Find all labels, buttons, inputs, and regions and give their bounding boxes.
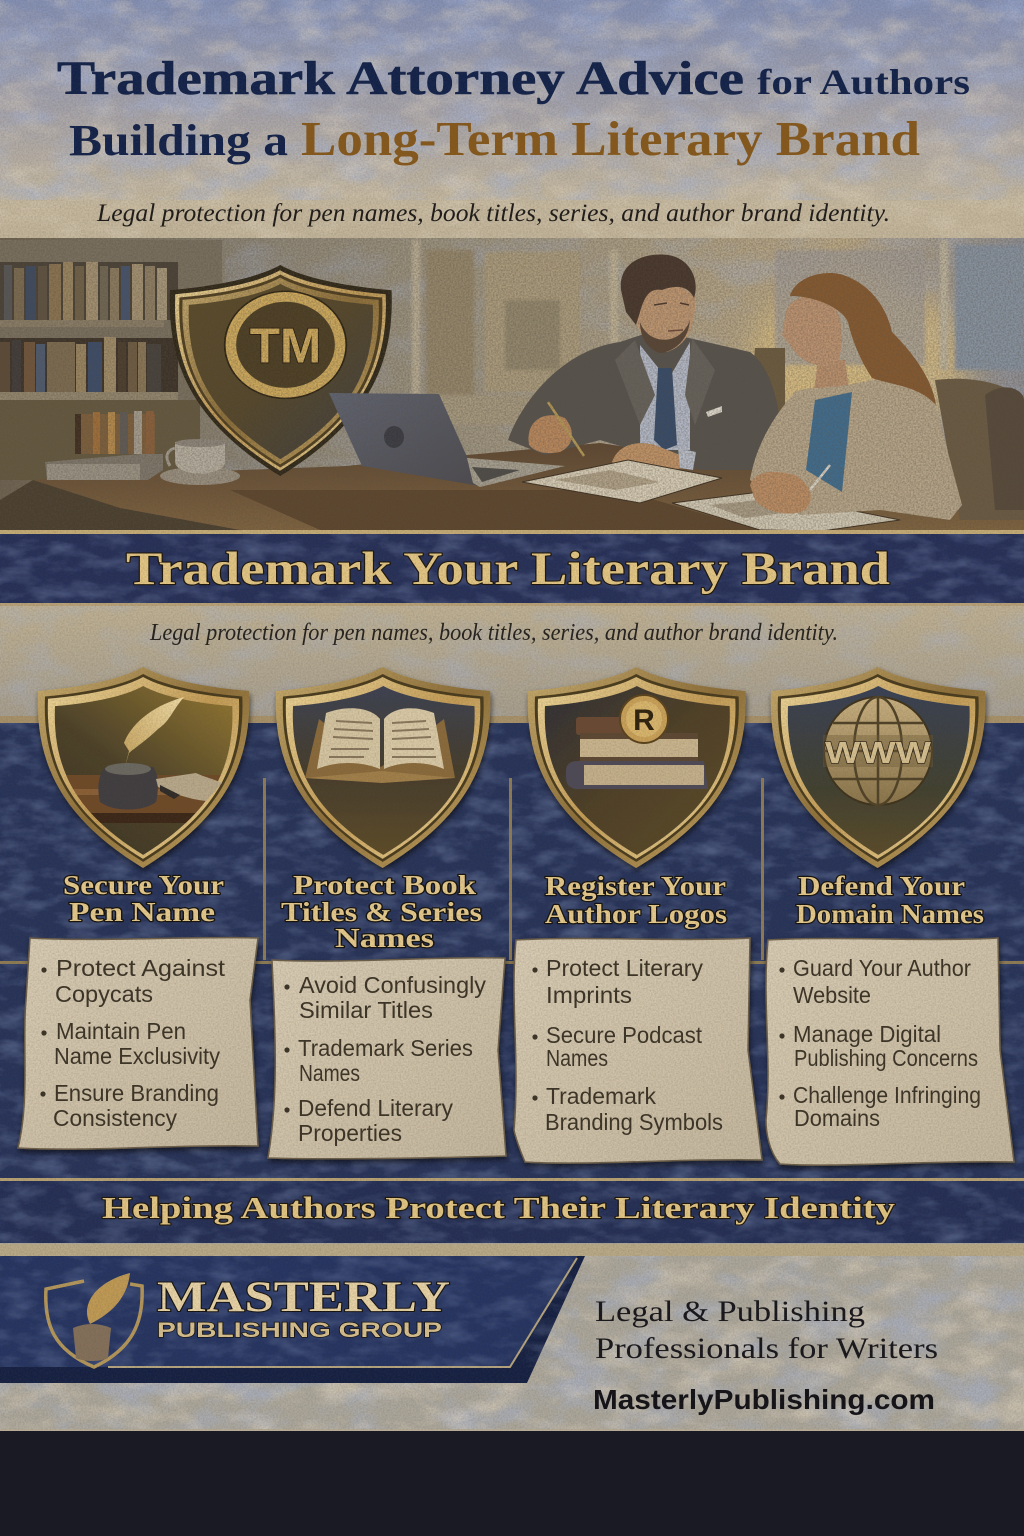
paper: pen name list: Consistency	[53, 1105, 177, 1131]
heading: Secure Your Pen Name: Secure Your	[63, 870, 224, 900]
attorney	[508, 254, 785, 472]
heading: Register Your Author Logos: Register Your	[545, 871, 726, 901]
banner: Helping Authors	[0, 1178, 1024, 1244]
heading: Defend Your Domain Names: Defend Your	[798, 871, 965, 901]
paper: domains list: Guard Your Author	[793, 955, 971, 981]
paper: logos list: Imprints	[546, 982, 632, 1008]
shield: quill and ink	[38, 667, 249, 868]
section subtitle: Legal protection for pen names, book titles, series, and author brand identity.	[149, 620, 838, 646]
desk	[0, 443, 1024, 532]
shield with TM	[170, 265, 392, 476]
heading: Protect Book Titles & Series Names: Protect Book	[293, 870, 476, 900]
bottom dark strip	[0, 1431, 1024, 1536]
paper: book titles list	[268, 958, 506, 1159]
R mark: R	[633, 704, 655, 737]
TM mark: TM	[250, 319, 321, 374]
paper: pen name list	[18, 938, 258, 1149]
footer logo plate: MASTERLY	[157, 1274, 450, 1321]
heading: Protect Book Titles & Series Names	[281, 870, 482, 953]
paper: domains list: Domains	[794, 1105, 880, 1131]
paper: domains list: Manage Digital	[793, 1021, 941, 1047]
icon: stacked books with R seal	[566, 695, 708, 789]
title: Building a	[69, 116, 288, 165]
section intro band	[0, 606, 1024, 720]
shield: open book	[276, 667, 490, 868]
heading: Protect Book Titles & Series Names: Names	[335, 923, 434, 953]
heading: Secure Your Pen Name	[63, 870, 224, 927]
heading: Secure Your Pen Name: Pen Name	[69, 897, 215, 927]
shield: www globe	[771, 667, 985, 868]
paper: logos list: Names	[546, 1045, 608, 1071]
logo shield and quill	[46, 1273, 142, 1367]
laptop	[329, 393, 565, 487]
www text: WWW	[825, 735, 932, 770]
banner: Helping Authors: Helping Authors Protect Their Literary Identity	[102, 1190, 896, 1225]
heading: Register Your Author Logos: Author Logos	[545, 899, 727, 929]
windows	[412, 240, 1024, 450]
paper: logos list: Branding Symbols	[545, 1109, 723, 1135]
paper: logos list: Secure Podcast	[546, 1022, 703, 1048]
footer tagline: Legal & Publishing	[595, 1295, 865, 1328]
website: MasterlyPublishing.com	[593, 1384, 935, 1415]
hero illustration: attorney consultation	[0, 238, 1024, 532]
documents	[522, 460, 900, 531]
client	[750, 273, 1024, 520]
icon: globe	[823, 697, 933, 805]
title: Long-Term Literary Brand	[301, 111, 920, 166]
navy panel: four columns	[0, 716, 1024, 1180]
heading: Defend Your Domain Names	[796, 871, 984, 929]
paper: logos list	[514, 938, 762, 1163]
icon: open book	[305, 708, 455, 783]
paper: pen name list: Copycats	[55, 981, 153, 1007]
heading: Defend Your Domain Names: Domain Names	[796, 899, 984, 929]
paper: pen name list: Protect Against	[56, 955, 226, 981]
bookshelf	[0, 240, 222, 480]
paper: pen name list: Ensure Branding	[54, 1080, 219, 1106]
paper: domains list: Website	[793, 982, 871, 1008]
paper: logos list: Trademark	[546, 1083, 656, 1109]
paper: pen name list: Maintain Pen	[56, 1018, 186, 1044]
title: Trademark Attorney Advice	[57, 52, 744, 105]
paper: pen name list: Name Exclusivity	[54, 1043, 220, 1069]
banner: Trademark Your Literary Brand	[0, 530, 1024, 606]
heading: Register Your Author Logos	[545, 871, 727, 929]
paper: book titles list: Properties	[298, 1120, 402, 1146]
footer tagline	[593, 1295, 938, 1415]
footer tagline: Professionals for Writers	[595, 1332, 938, 1365]
footer logo plate	[0, 1256, 585, 1383]
paper: domains list	[766, 938, 1014, 1165]
paper: book titles list: Trademark Series	[298, 1035, 473, 1061]
paper: logos list: Protect Literary	[546, 955, 703, 981]
paper: domains list: Publishing Concerns	[794, 1045, 978, 1071]
paper: book titles list: Similar Titles	[299, 997, 433, 1023]
heading: Protect Book Titles & Series Names: Titles & Series	[281, 897, 482, 927]
paper: book titles list: Defend Literary	[298, 1095, 453, 1121]
paper: book titles list: Names	[299, 1060, 360, 1086]
paper: domains list: Challenge Infringing	[793, 1082, 981, 1108]
subtitle: Legal protection for pen names, book titles, series, and author brand identity.	[96, 200, 890, 227]
shield: registered books	[528, 667, 746, 868]
footer background	[0, 1243, 1024, 1431]
banner: Trademark Your Literary Brand: Trademark Your Literary Brand	[126, 543, 890, 595]
footer logo plate: PUBLISHING GROUP	[157, 1319, 442, 1342]
title	[57, 52, 970, 166]
icon: inkwell and feather	[66, 697, 222, 823]
title: for Authors	[757, 62, 970, 102]
paper: book titles list: Avoid Confusingly	[299, 972, 487, 998]
stack of books and mug	[45, 411, 240, 485]
